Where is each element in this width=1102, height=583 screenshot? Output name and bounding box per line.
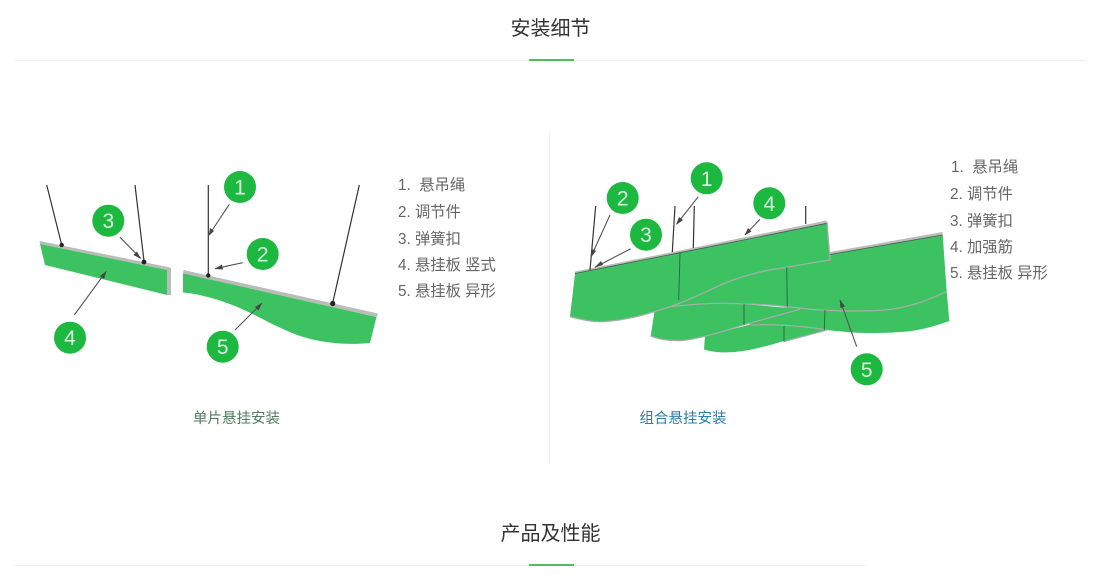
caption: combined suspension: 组合悬挂安装 (640, 410, 726, 427)
caption: single suspension: 单片悬挂安装 (193, 410, 280, 427)
hanging wires (590, 206, 806, 270)
legend: single suspension: 5. 悬挂板 异形 (398, 282, 496, 300)
legend: combined suspension (950, 159, 1048, 282)
hanging wires (47, 185, 359, 306)
legend: combined suspension: 1. 悬吊绳 (951, 159, 1018, 176)
number badges: 4 (64, 327, 76, 350)
number badges: 2 (617, 188, 629, 210)
number badges: 2 (257, 244, 269, 266)
number badges (607, 162, 883, 385)
number badges: 5 (217, 336, 229, 359)
number badges (54, 171, 279, 363)
panel: combined suspension (570, 162, 949, 427)
number badges: 1 (701, 168, 713, 191)
heading: products and performance: 产品及性能 (500, 522, 600, 545)
arrows (590, 197, 857, 347)
number badges: 3 (102, 210, 114, 233)
diagram: combined panels (570, 220, 949, 352)
panel: single suspension (40, 171, 378, 427)
number badges: 4 (763, 193, 775, 216)
number badges: 5 (861, 359, 873, 382)
legend: single suspension: 4. 悬挂板 竖式 (398, 256, 496, 274)
legend: single suspension: 1. 悬吊绳 (398, 177, 465, 194)
diagram: shaped panel (183, 270, 378, 344)
legend: single suspension: 3. 弹簧扣 (398, 231, 461, 248)
heading: install details: 安装细节 (510, 17, 590, 40)
legend: combined suspension: 2. 调节件 (950, 186, 1013, 203)
legend: single suspension (398, 177, 496, 300)
number badges: 1 (234, 176, 246, 200)
legend: combined suspension: 5. 悬挂板 异形 (950, 264, 1048, 282)
legend: combined suspension: 4. 加强筋 (950, 239, 1013, 256)
number badges: 3 (640, 224, 652, 247)
legend: single suspension: 2. 调节件 (398, 204, 461, 221)
legend: combined suspension: 3. 弹簧扣 (950, 213, 1013, 230)
diagram: vertical panel (40, 241, 171, 295)
arrows (74, 204, 262, 330)
